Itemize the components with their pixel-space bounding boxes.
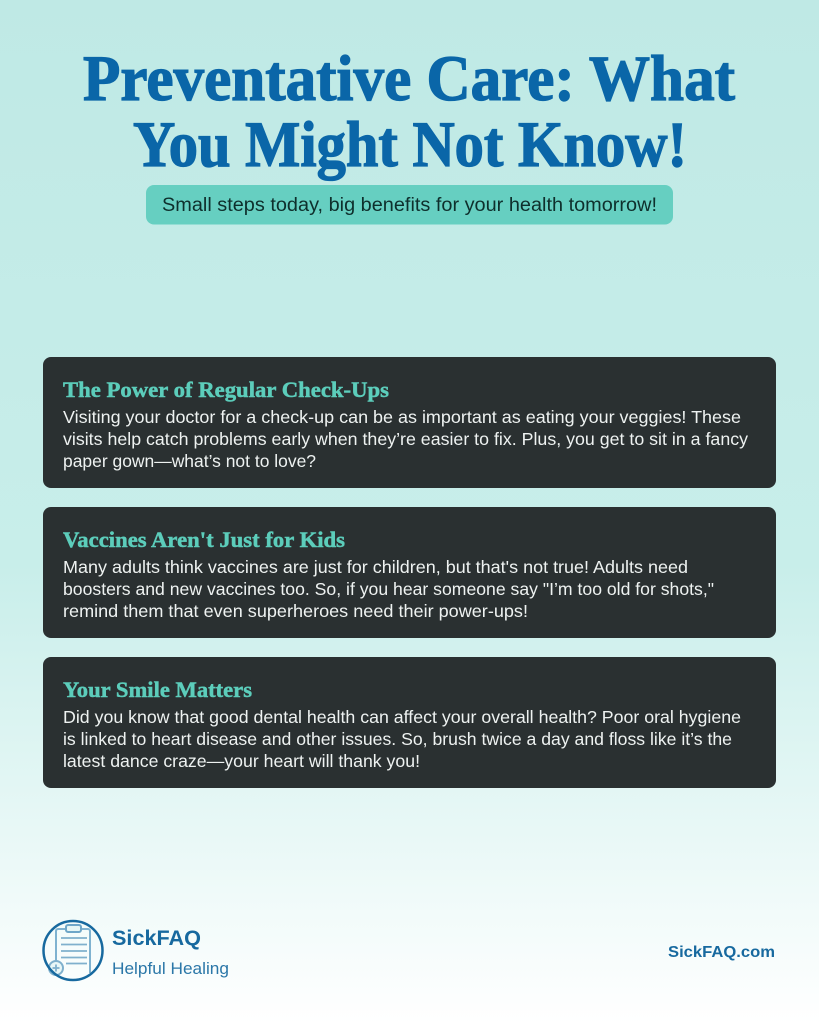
text block: vaccines: remind them that even superheroes need their power-ups!	[63, 601, 528, 621]
text block: vaccines: boosters and new vaccines too. So, if you hear someone say "I’m too old for shots,"	[63, 579, 714, 599]
text block: smile: latest dance craze—your heart will thank you!	[63, 751, 420, 771]
title: Preventative Care: What	[83, 43, 735, 115]
text block: vaccines: Many adults think vaccines are just for children, but that's not true! Adults need	[63, 557, 688, 577]
title: You Might Not Know!	[133, 109, 687, 181]
website: SickFAQ.com	[668, 944, 775, 961]
text block: check-ups: visits help catch problems early when they’re easier to fix. Plus, you get to sit in a fancy	[63, 429, 748, 449]
panel: vaccines	[43, 507, 776, 638]
title	[83, 43, 735, 181]
text block: check-ups: Visiting your doctor for a check-up can be as important as eating your veggies! These	[63, 407, 741, 427]
panel: regular check-ups	[43, 357, 776, 488]
heading: check-ups: The Power of Regular Check-Ups	[63, 377, 389, 402]
text block: check-ups: paper gown—what’s not to love?	[63, 451, 316, 471]
text block: smile: Did you know that good dental health can affect your overall health? Poor oral hygiene	[63, 707, 741, 727]
heading: vaccines: Vaccines Aren't Just for Kids	[63, 527, 345, 552]
icon: clipboard logo	[44, 921, 102, 980]
subtitle pill	[146, 185, 673, 224]
subtitle pill: Small steps today, big benefits for your health tomorrow!	[162, 195, 657, 216]
text block: vaccines	[63, 557, 714, 621]
panel: smile	[43, 657, 776, 788]
brand tagline: Helpful Healing	[112, 959, 229, 978]
text block: smile: is linked to heart disease and other issues. So, brush twice a day and floss like it’s the	[63, 729, 732, 749]
text block: smile	[63, 707, 741, 771]
text block: check-ups	[63, 407, 748, 471]
heading: smile: Your Smile Matters	[63, 677, 252, 702]
brand name: SickFAQ	[112, 927, 201, 950]
